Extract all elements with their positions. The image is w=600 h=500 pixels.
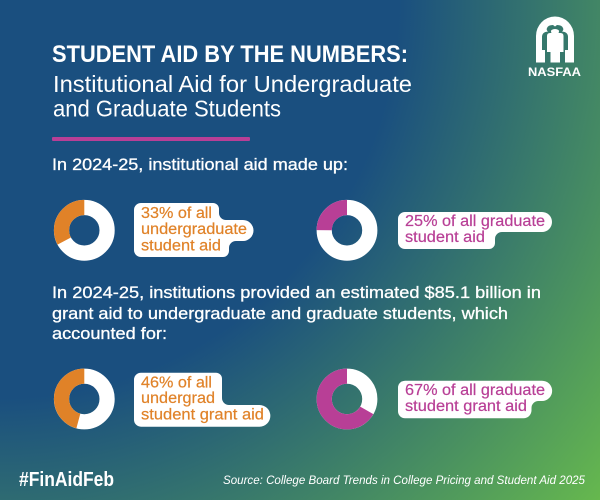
callout: 25% of all graduate student aid [398,212,552,249]
callout: 46% of all undergrad student grant aid: student grant aid [141,406,264,423]
heading: first section: In 2024-25, institutional aid made up: [52,156,348,174]
callout: 33% of all undergraduate student aid: student aid [141,238,221,254]
text block: second section intro: grant aid to undergraduate and graduate students, which [52,305,508,323]
callout: 25% of all graduate student aid: 25% of all graduate [405,213,545,230]
text block: second section intro: accounted for: [52,325,167,343]
callout: 25% of all graduate student aid: student aid [405,229,485,246]
title underline [52,137,250,141]
callout: 33% of all undergraduate student aid [134,203,254,257]
hashtag: #FinAidFeb [19,469,114,491]
title block: Institutional Aid for Undergraduate [53,71,412,97]
callout: 46% of all undergrad student grant aid [134,373,270,427]
callout: 67% of all graduate student grant aid: 67% of all graduate [405,382,545,399]
donut: 33% undergraduate aid [62,208,107,253]
text block: second section intro: In 2024-25, institutions provided an estimated $85.1 billion in [52,284,541,302]
title block: STUDENT AID BY THE NUMBERS: [52,41,408,68]
callout: 67% of all graduate student grant aid [398,381,552,418]
text block: second section intro [52,284,541,343]
callout: 46% of all undergrad student grant aid: 46% of all [141,374,212,391]
title block: and Graduate Students [53,96,281,122]
icon: NASFAA logo: NASFAA [528,65,581,79]
callout: 33% of all undergraduate student aid: 33% of all [141,205,212,222]
donut: 46% undergrad grant aid [62,376,107,422]
donut: 25% graduate aid [324,208,370,253]
source note: Source: College Board Trends in College Pricing and Student Aid 2025 [223,475,586,487]
callout: 33% of all undergraduate student aid: undergraduate [141,221,247,238]
donut: 67% graduate grant aid [324,376,370,422]
icon: NASFAA logo [528,16,581,79]
callout: 46% of all undergrad student grant aid: undergrad [141,390,215,407]
title block [52,41,412,122]
callout: 67% of all graduate student grant aid: student grant aid [405,398,527,415]
